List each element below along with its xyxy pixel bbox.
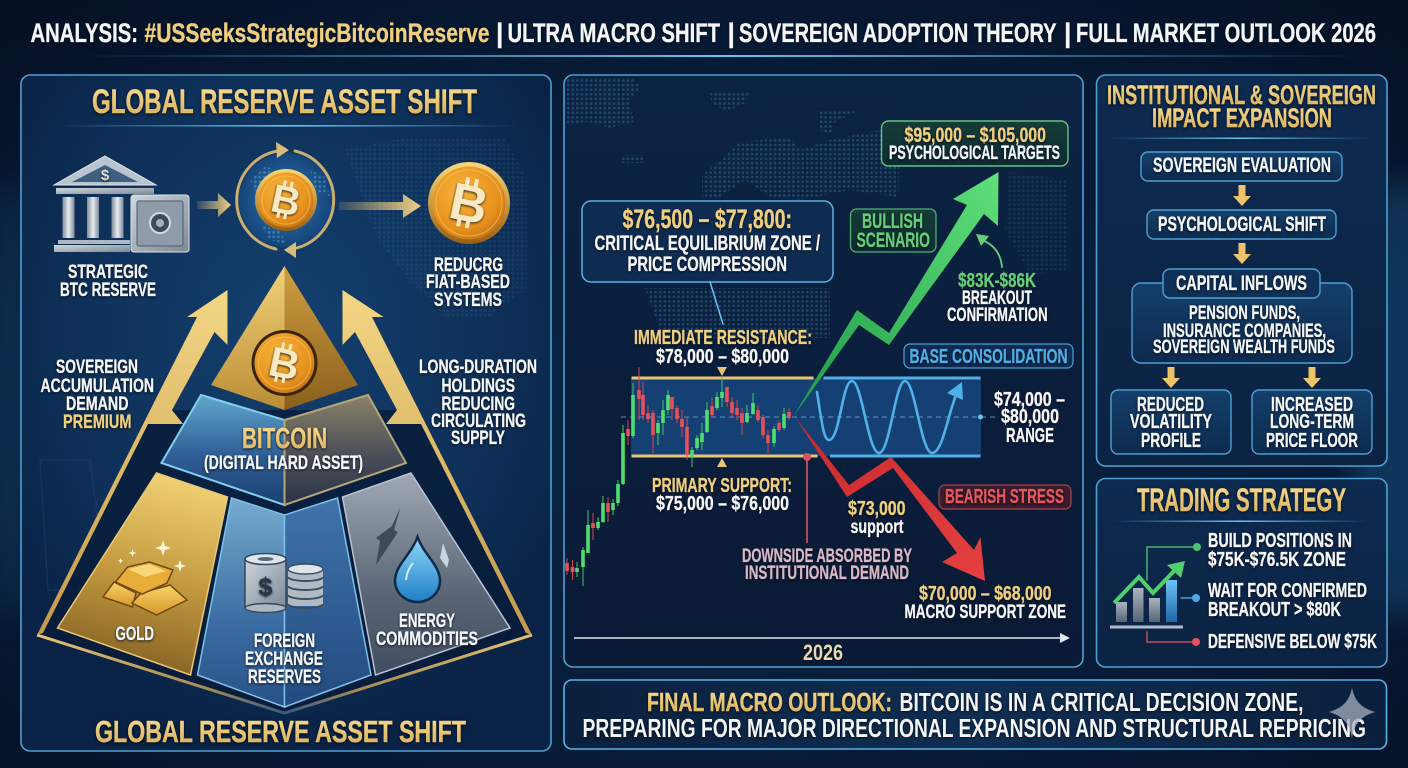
icon: bank and vault (54, 156, 189, 252)
box: increased long-term price floor: PRICE FLOOR (1266, 429, 1358, 452)
label: breakout confirmation (947, 269, 1048, 326)
box: increased long-term price floor: LONG-TERM (1270, 410, 1354, 433)
pyramid segment: energy commodities: COMMODITIES (376, 628, 478, 650)
icon: sparkle star (1329, 688, 1375, 738)
label: sovereign accumulation demand premium: ACCUMULATION (40, 375, 154, 397)
label: downside absorbed by institutional demand: INSTITUTIONAL DEMAND (745, 562, 909, 584)
pyramid (37, 266, 532, 713)
box: reduced volatility profile (1111, 390, 1231, 454)
label: 73000 support: support (850, 516, 904, 538)
text: final macro outlook: FINAL MACRO OUTLOOK: (647, 687, 892, 717)
heading: global reserve asset shift: GLOBAL RESERVE ASSET SHIFT (92, 83, 477, 121)
box: capital inflows (1163, 269, 1320, 298)
callout: critical equilibrium zone: PRICE COMPRESSION (628, 252, 787, 276)
pyramid layer: bitcoin digital hard asset: (DIGITAL HARD ASSET) (204, 452, 363, 474)
badge: base consolidation: BASE CONSOLIDATION (910, 345, 1068, 368)
box: psychological targets: $95,000 – $105,000 (904, 123, 1046, 147)
title: | (1064, 18, 1071, 48)
label: reducing fiat-based systems: REDUCRG (434, 254, 503, 276)
heading: institutional and sovereign impact expansion: IMPACT EXPANSION (1152, 103, 1332, 133)
pyramid segment: foreign exchange reserves (198, 498, 371, 707)
label: primary support (652, 474, 792, 515)
label: range 74000 to 80000: $80,000 (1001, 405, 1059, 428)
box: reduced volatility profile: REDUCED (1137, 393, 1204, 416)
pyramid segment: energy commodities: ENERGY (399, 610, 455, 632)
label: long-duration holdings: REDUCING (442, 393, 515, 415)
arrow: down left (1162, 367, 1180, 388)
chart: consolidation wave with arrow (817, 381, 963, 453)
title: | (728, 18, 735, 48)
panel: global reserve asset shift (21, 75, 551, 751)
callout: critical equilibrium zone: $76,500 – $77,800: (622, 204, 792, 234)
arrow: down right (1303, 367, 1321, 388)
badge: bullish scenario (850, 209, 936, 252)
text: wait for breakout: BREAKOUT > $80K (1208, 598, 1341, 621)
title: #USSeeksStrategicBitcoinReserve (144, 18, 490, 48)
badge: bullish scenario: BULLISH (862, 209, 923, 233)
pyramid top: gold capstone (211, 266, 358, 410)
panel: price scenarios chart (564, 75, 1083, 667)
callout: critical equilibrium zone: CRITICAL EQUILIBRIUM ZONE / (594, 231, 820, 255)
text: final macro outlook (582, 687, 1366, 743)
label: immediate resistance (634, 326, 812, 368)
pyramid layer: bitcoin digital hard asset: BITCOIN (242, 423, 327, 455)
label: strategic btc reserve: BTC RESERVE (60, 279, 156, 301)
label: macro support zone: MACRO SUPPORT ZONE (904, 601, 1066, 623)
title: ANALYSIS: (30, 18, 138, 48)
label: sovereign accumulation demand premium: DEMAND (66, 393, 128, 415)
pyramid segment: gold: GOLD (116, 623, 154, 645)
label: range 74000 to 80000: $74,000 – (994, 388, 1065, 411)
arrow: globe to coin (339, 194, 421, 218)
arrow: down (1233, 185, 1251, 206)
icon: bitcoin coin large (428, 162, 510, 244)
title: | (496, 18, 503, 48)
label: reducing fiat-based systems (426, 254, 510, 311)
arrow: vault to globe (197, 193, 231, 217)
icon: bitcoin coin capstone (252, 330, 318, 396)
pyramid layer: bitcoin digital hard asset (162, 395, 406, 505)
icon: rising bars with arrow (1110, 561, 1185, 628)
connector: green entry (1147, 543, 1201, 580)
label: year 2026: 2026 (803, 640, 843, 665)
icon: cash can and coin stack: $ (259, 573, 273, 601)
label: range 74000 to 80000 (994, 388, 1065, 447)
label: strategic btc reserve: STRATEGIC (68, 261, 148, 283)
connector: red defensive (1147, 632, 1200, 646)
label: breakout confirmation: BREAKOUT (962, 287, 1032, 309)
arrow: callout leader (710, 282, 723, 324)
badge: base consolidation (904, 344, 1073, 368)
box: psychological shift (1147, 210, 1336, 239)
footer heading: global reserve asset shift: GLOBAL RESERVE ASSET SHIFT (95, 714, 466, 749)
label: macro support zone (904, 582, 1066, 623)
label: reducing fiat-based systems: SYSTEMS (434, 289, 502, 311)
arrow: bullish path (793, 172, 998, 417)
label: sovereign accumulation demand premium: PREMIUM (63, 411, 132, 433)
text: build positions (1208, 529, 1352, 571)
label: sovereign accumulation demand premium: SOVEREIGN (56, 356, 138, 378)
label: immediate resistance: $78,000 – $80,000 (656, 345, 789, 368)
icon: water drop (395, 537, 440, 602)
pyramid segment: energy commodities (342, 473, 510, 675)
title: ULTRA MACRO SHIFT (508, 18, 720, 48)
box: reduced volatility profile: PROFILE (1141, 429, 1201, 452)
icon: cash can and coin stack (245, 554, 323, 612)
pyramid segment: gold (58, 473, 228, 675)
icon: bitcoin globe with cycle arrows (237, 142, 334, 258)
badge: bearish stress: BEARISH STRESS (945, 485, 1064, 508)
title (30, 18, 1376, 48)
label: immediate resistance: IMMEDIATE RESISTANCE: (634, 326, 812, 349)
label: breakout confirmation: CONFIRMATION (947, 304, 1048, 326)
label: long-duration holdings: SUPPLY (451, 427, 505, 449)
panel: trading strategy (1096, 478, 1387, 667)
box: psychological targets: PSYCHOLOGICAL TARGETS (889, 142, 1060, 164)
box: psychological shift: PSYCHOLOGICAL SHIFT (1158, 212, 1326, 236)
label: range 74000 to 80000: RANGE (1006, 424, 1054, 447)
label: primary support: PRIMARY SUPPORT: (652, 474, 792, 497)
callout: critical equilibrium zone (582, 201, 833, 282)
panel: institutional and sovereign impact expansion (1096, 75, 1387, 466)
arrow: left pyramid edge (37, 290, 228, 635)
marker: institutional demand leader (803, 453, 811, 543)
arrow: breakout pointer (976, 234, 1002, 267)
text: wait for breakout (1208, 579, 1367, 621)
label: downside absorbed by institutional demand (742, 545, 912, 584)
label: long-duration holdings (419, 356, 537, 449)
badge: bearish stress (939, 485, 1071, 509)
icon: gold bars (103, 540, 187, 615)
connector: blue wait (1181, 594, 1200, 602)
label: downside absorbed by institutional demand: DOWNSIDE ABSORBED BY (742, 545, 912, 567)
icon: bank and vault: $ (101, 167, 110, 184)
arrow: time axis (574, 633, 1070, 643)
box: reduced volatility profile: VOLATILITY (1130, 410, 1212, 433)
box: sovereign evaluation (1141, 152, 1342, 181)
icon: lightning shard (376, 507, 400, 565)
box: capital inflows group (1132, 269, 1352, 363)
box: capital inflows group: PENSION FUNDS, (1189, 302, 1300, 324)
pyramid segment: foreign exchange reserves: RESERVES (248, 666, 321, 688)
title: SOVEREIGN ADOPTION THEORY (739, 18, 1057, 48)
box: increased long-term price floor (1252, 390, 1372, 454)
box: capital inflows: CAPITAL INFLOWS (1176, 271, 1307, 295)
label: long-duration holdings: HOLDINGS (442, 375, 515, 397)
chart: candlesticks (567, 367, 789, 586)
arrow: down (1233, 243, 1251, 264)
label: 73000 support: $73,000 (848, 497, 906, 520)
label: macro support zone: $70,000 – $68,000 (919, 582, 1052, 605)
label: 73000 support (848, 497, 906, 538)
panel: final macro outlook (564, 680, 1386, 749)
label: breakout confirmation: $83K-$86K (958, 269, 1036, 292)
box: capital inflows group: INSURANCE COMPANIES, (1163, 320, 1326, 342)
label: strategic btc reserve (60, 261, 156, 301)
heading: institutional and sovereign impact expansion (1107, 80, 1376, 133)
icon: bitcoin globe with cycle arrows: B (267, 176, 304, 226)
label: long-duration holdings: CIRCULATING (431, 410, 526, 432)
arrow: right pyramid edge (342, 290, 532, 635)
badge: bullish scenario: SCENARIO (856, 228, 930, 252)
text: build positions: BUILD POSITIONS IN (1208, 529, 1352, 552)
arrow: bearish path (795, 417, 985, 581)
text: build positions: $75K-$76.5K ZONE (1208, 548, 1346, 571)
icon: bitcoin coin capstone: B (265, 337, 304, 390)
box: increased long-term price floor: INCREASED (1271, 393, 1353, 416)
label: reducing fiat-based systems: FIAT-BASED (426, 271, 510, 293)
pyramid segment: foreign exchange reserves: FOREIGN (254, 630, 315, 652)
label: long-duration holdings: LONG-DURATION (419, 356, 537, 378)
chart: consolidation range band (621, 367, 996, 467)
icon: bitcoin coin large: B (444, 172, 493, 237)
label: sovereign accumulation demand premium (40, 356, 154, 433)
label: primary support: $75,000 – $76,000 (656, 492, 789, 515)
box: psychological targets (882, 121, 1068, 166)
pyramid segment: foreign exchange reserves: EXCHANGE (245, 648, 323, 670)
